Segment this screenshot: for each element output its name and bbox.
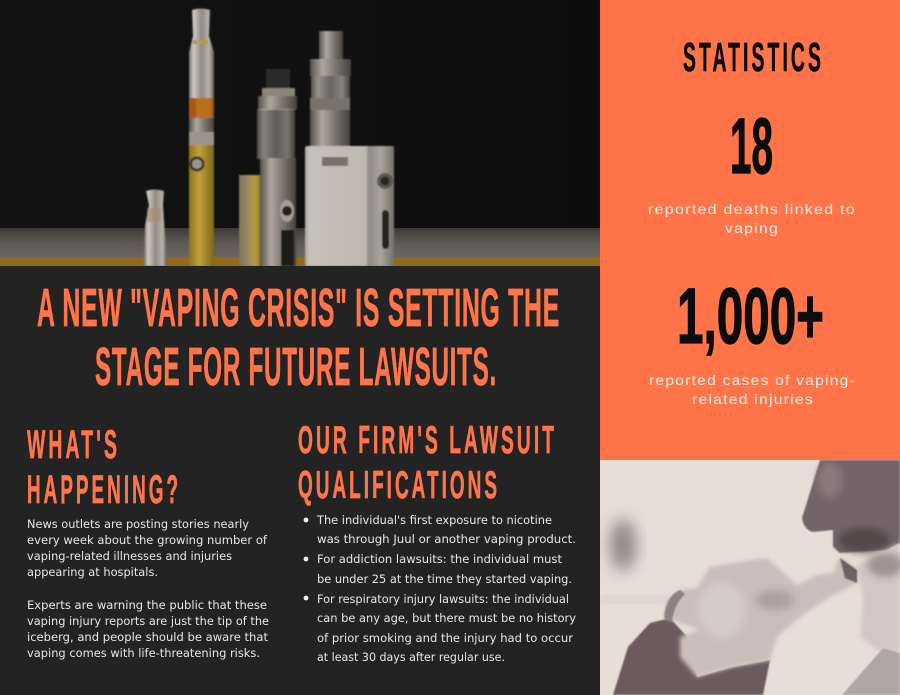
stat caption: deaths: vaping <box>725 220 779 236</box>
stat caption: deaths <box>648 201 856 236</box>
stat caption: injuries: reported cases of vaping- <box>649 372 856 388</box>
text block: what's happening: News outlets are posting stories nearly <box>27 517 249 531</box>
text: OUR FIRM'S LAWSUIT <box>298 419 557 462</box>
text block: what's happening: Experts are warning the public that these <box>27 598 267 612</box>
text block: what's happening: every week about the growing number of <box>27 533 268 547</box>
heading: what's happening: WHAT'S <box>27 423 120 467</box>
bullet list: qualifications: be under 25 at the time they started vaping. <box>317 572 572 586</box>
text block: what's happening <box>27 517 269 660</box>
heading: what's happening <box>27 423 181 512</box>
photo: vaping devices <box>0 0 600 266</box>
panel: statistics: 18 <box>730 101 773 190</box>
panel: statistics <box>600 0 900 460</box>
bullet list: qualifications: at least 30 days after regular use. <box>317 650 505 664</box>
title <box>37 278 560 397</box>
heading: our firm's lawsuit qualifications: QUALIFICATIONS <box>298 464 500 507</box>
text: HAPPENING? <box>27 468 181 512</box>
bullet list: qualifications: For addiction lawsuits: the individual must <box>317 552 562 566</box>
bullet list: qualifications: of prior smoking and the injury had to occur <box>317 631 573 645</box>
text block: what's happening: appearing at hospitals. <box>27 565 158 579</box>
heading: our firm's lawsuit qualifications <box>298 419 557 507</box>
bullet list: qualifications: can be any age, but there must be no history <box>317 611 576 625</box>
background panel <box>0 0 600 695</box>
bullet list: qualifications <box>304 513 576 664</box>
photo: man exhaling vapor <box>600 460 900 695</box>
text block: what's happening: vaping comes with life-threatening risks. <box>27 646 260 660</box>
stat caption: injuries <box>649 372 856 407</box>
bullet list: qualifications: was through Juul or another vaping product. <box>317 532 576 546</box>
text block: what's happening: iceberg, and people should be aware that <box>27 630 268 644</box>
text block: what's happening: vaping injury reports are just the tip of the <box>27 614 269 628</box>
stat caption: injuries: related injuries <box>692 391 814 407</box>
bullet list: qualifications: For respiratory injury lawsuits: the individual <box>317 592 569 606</box>
stat caption: deaths: reported deaths linked to <box>648 201 856 217</box>
text block: what's happening: vaping-related illnesses and injuries <box>27 549 232 563</box>
bullet list: qualifications: The individual's first exposure to nicotine <box>316 513 552 527</box>
